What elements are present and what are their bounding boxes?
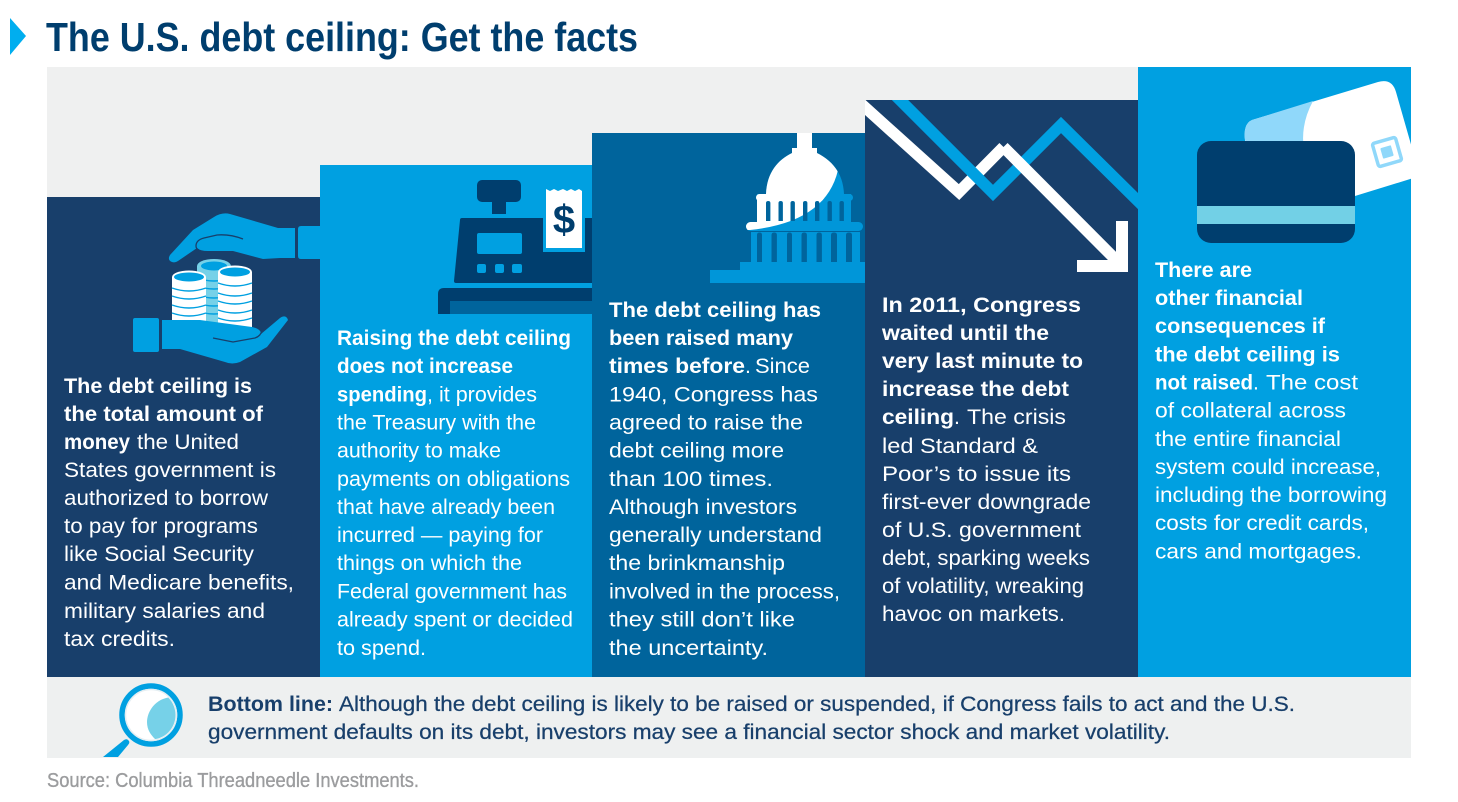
text block: panel 4: . — [954, 405, 960, 429]
text block: bottom line: government defaults on its debt, investors may see a financial sector shock and market volatility. — [208, 720, 1170, 744]
text block: panel 5: the debt ceiling is — [1155, 342, 1340, 366]
text block: panel 4: havoc on markets. — [882, 602, 1065, 626]
source note: Source: Columbia Threadneedle Investments. — [47, 770, 419, 792]
text block: panel 5: costs for credit cards, — [1155, 511, 1369, 535]
title text: The U.S. debt ceiling: Get the facts — [46, 14, 638, 60]
text block: bottom line — [208, 692, 1295, 744]
text block: panel 4: In 2011, Congress — [882, 293, 1081, 317]
text block: panel 1: the total amount of — [64, 402, 264, 426]
text block: panel 4: increase the debt — [882, 377, 1069, 401]
text block: panel 5: the entire financial — [1155, 427, 1341, 451]
text block: panel 1: military salaries and — [64, 599, 265, 623]
text block: panel 3: generally understand — [609, 523, 822, 547]
text block: panel 2: already spent or decided — [337, 608, 573, 632]
text block: panel 1: the United — [137, 430, 239, 454]
text block: panel 2: spending — [337, 382, 427, 406]
text block: panel 3: Since — [755, 354, 810, 378]
text block: panel 5 — [1155, 258, 1387, 564]
text block: panel 4 — [881, 293, 1091, 626]
grey background panel — [47, 67, 1411, 207]
text block: panel 1: authorized to borrow — [64, 486, 269, 510]
text block: panel 1: tax credits. — [64, 627, 175, 651]
text block: panel 3: been raised many — [609, 326, 793, 350]
panel: total amount of money — [47, 197, 320, 677]
text block: panel 5: consequences if — [1155, 314, 1326, 338]
panel: raising the ceiling — [320, 165, 592, 677]
icon: capitol building — [710, 133, 865, 283]
text block: panel 3: they still don’t like — [609, 608, 795, 632]
text block: panel 3 — [609, 298, 840, 660]
text block: panel 2: it provides — [439, 382, 537, 406]
text block: panel 2: incurred — paying for — [337, 523, 543, 547]
text block: panel 5: other financial — [1155, 286, 1303, 310]
text block: bottom line: Bottom line: — [208, 692, 333, 716]
text block: panel 4: waited until the — [881, 321, 1049, 345]
text block: panel 4: of U.S. government — [882, 518, 1081, 542]
text block: panel 2: things on which the — [337, 551, 522, 575]
text block: panel 4: led Standard & — [882, 434, 1038, 458]
text block: panel 2: that have already been — [337, 495, 555, 519]
panel: 2011 downgrade — [858, 93, 1145, 677]
panel: bottom line — [47, 677, 1411, 758]
text block: panel 4: first-ever downgrade — [882, 490, 1091, 514]
text block: panel 5: cars and mortgages. — [1155, 540, 1362, 564]
panel: other financial consequences — [1138, 67, 1420, 677]
text block: panel 1 — [64, 374, 294, 651]
text block: panel 3: Although investors — [609, 495, 797, 519]
icon: cash register: $ — [553, 198, 575, 242]
text block: panel 3: debt ceiling more — [609, 438, 784, 462]
title — [10, 14, 638, 60]
text block: panel 3: agreed to raise the — [609, 410, 803, 434]
text block: panel 5: not raised — [1155, 370, 1253, 394]
text block: panel 4: ceiling — [882, 405, 954, 429]
text block: panel 1: and Medicare benefits, — [64, 570, 294, 594]
text block: panel 4: The crisis — [967, 405, 1066, 429]
text block: panel 2: payments on obligations — [337, 467, 570, 491]
text block: panel 2 — [337, 326, 573, 660]
text block: panel 3: . — [745, 354, 751, 378]
icon: magnifying glass — [103, 686, 185, 757]
text block: panel 2: the Treasury with the — [337, 410, 536, 434]
icon: credit cards — [1197, 81, 1420, 243]
text block: panel 1: States government is — [64, 458, 276, 482]
text block: panel 5: of collateral across — [1155, 398, 1346, 422]
text block: panel 5: . — [1253, 370, 1259, 394]
text block: panel 3: 1940, Congress has — [609, 382, 818, 406]
text block: panel 5: system could increase, — [1155, 455, 1381, 479]
icon: falling line chart with arrow — [858, 93, 1145, 272]
icon: cash register — [438, 180, 592, 314]
text block: panel 4: of volatility, wreaking — [882, 574, 1084, 598]
icon: hands protecting coins — [133, 213, 320, 364]
text block: panel 5: including the borrowing — [1155, 483, 1387, 507]
text block: panel 2: Raising the debt ceiling — [337, 326, 571, 350]
text block: panel 5: There are — [1155, 258, 1252, 282]
text block: panel 5: The cost — [1266, 370, 1358, 394]
text block: panel 3: The debt ceiling has — [609, 298, 821, 322]
text block: panel 3: times before — [609, 354, 745, 378]
text block: panel 2: to spend. — [337, 636, 426, 660]
text block: panel 1: like Social Security — [64, 542, 254, 566]
panel: raised many times — [592, 133, 865, 677]
text block: panel 4: very last minute to — [882, 349, 1083, 373]
text block: panel 4: Poor’s to issue its — [882, 462, 1071, 486]
text block: panel 1: to pay for programs — [64, 514, 258, 538]
text block: panel 2: does not increase — [337, 354, 513, 378]
text block: panel 2: Federal government has — [337, 580, 567, 604]
text block: bottom line: Although the debt ceiling is likely to be raised or suspended, if Congress fails to act and the U.S. — [339, 692, 1295, 716]
text block: panel 3: involved in the process, — [609, 580, 840, 604]
icon: title arrow — [10, 18, 26, 55]
text block: panel 2: , — [427, 382, 433, 406]
text block: panel 3: the brinkmanship — [609, 551, 785, 575]
text block: panel 2: authority to make — [337, 438, 501, 462]
text block: panel 3: the uncertainty. — [609, 636, 768, 660]
text block: panel 3: than 100 times. — [609, 467, 773, 491]
text block: panel 4: debt, sparking weeks — [882, 546, 1090, 570]
text block: panel 1: The debt ceiling is — [64, 374, 252, 398]
text block: panel 1: money — [64, 430, 130, 454]
